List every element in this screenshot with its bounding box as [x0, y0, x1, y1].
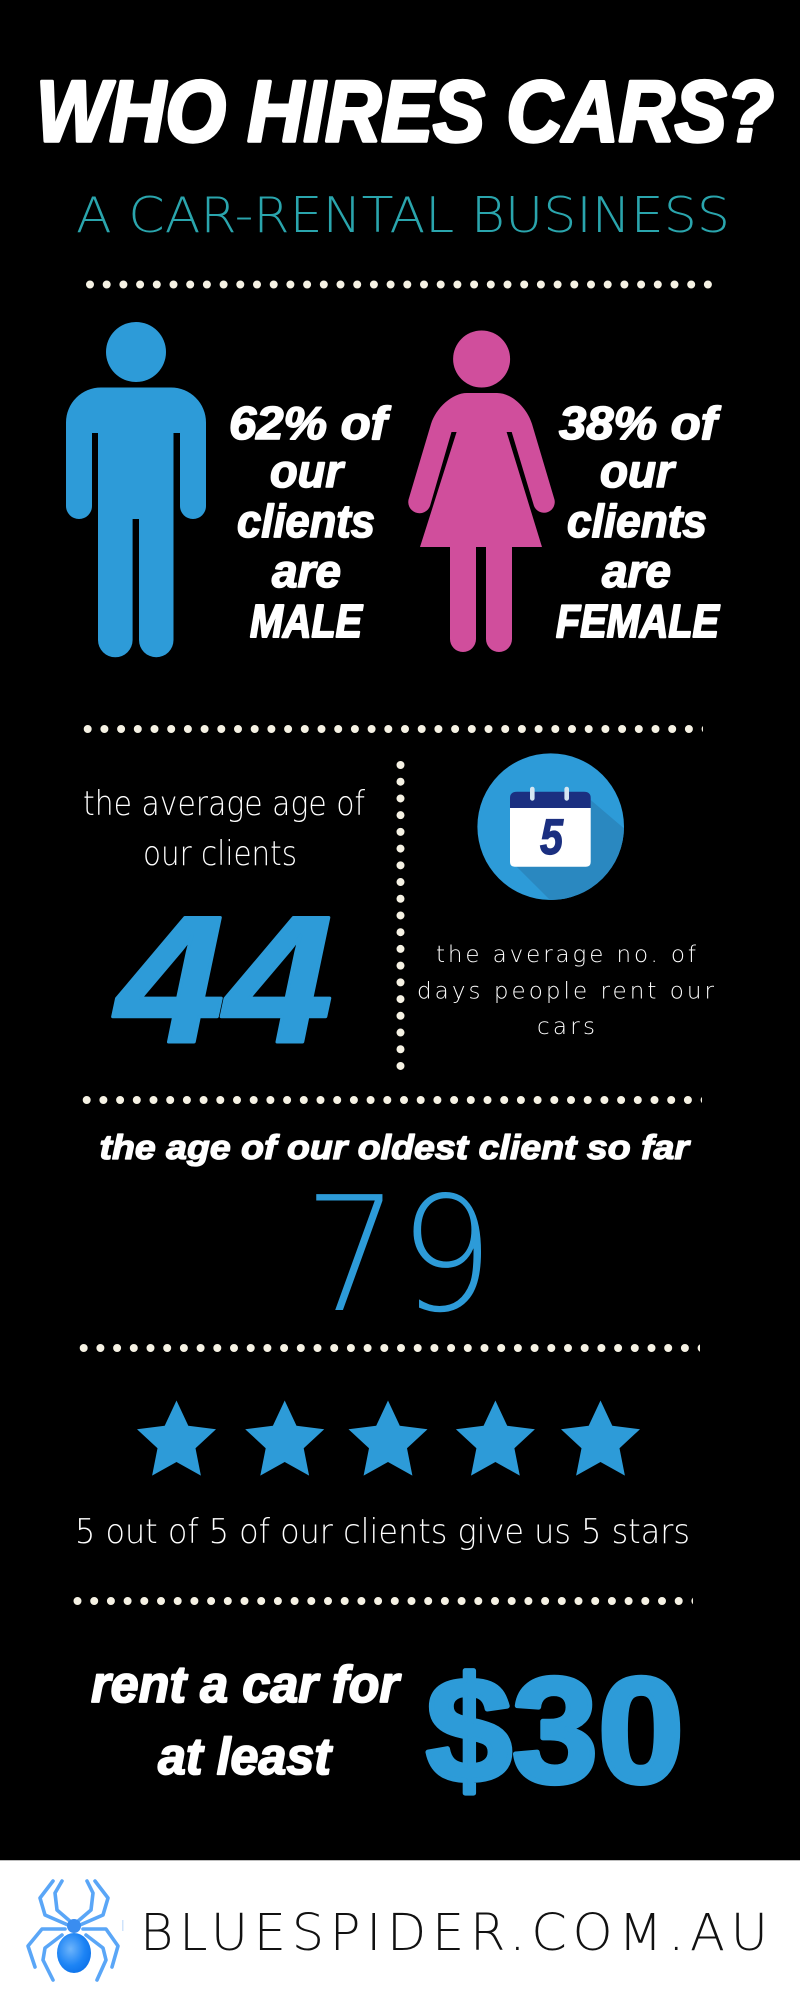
male statistic: clients [237, 495, 375, 547]
icon: man [66, 322, 206, 657]
male statistic: MALE [250, 595, 363, 647]
male statistic: our [270, 445, 345, 497]
average age label [83, 784, 365, 874]
icon: five stars [137, 1400, 640, 1476]
subtitle: A CAR-RENTAL BUSINESS [76, 187, 730, 244]
male statistic: are [272, 545, 341, 597]
icon: woman [408, 330, 555, 652]
average age label: the average age of [83, 784, 365, 824]
rental days label: cars [537, 1014, 595, 1040]
price value: $30 [426, 1646, 684, 1814]
female statistic: FEMALE [556, 595, 720, 647]
panel: star rating [75, 1400, 690, 1552]
average age label: our clients [143, 834, 297, 874]
female statistic: clients [567, 495, 707, 547]
website address: BLUESPIDER.COM.AU [140, 1904, 768, 1963]
oldest client heading: the age of our oldest client so far [100, 1129, 691, 1167]
female statistic: our [600, 445, 676, 497]
panel: average age [83, 784, 365, 1081]
female statistic: 38% of [559, 397, 722, 449]
price label: rent a car for [91, 1656, 402, 1714]
rental days label [417, 942, 715, 1040]
price label: at least [158, 1728, 334, 1786]
icon: calendar [477, 753, 624, 900]
male statistic [229, 397, 392, 647]
panel: oldest client [100, 1129, 691, 1348]
icon: spider logo [28, 1881, 124, 1980]
female statistic [556, 397, 722, 647]
rental days label: days people rent our [417, 978, 715, 1004]
star rating label: 5 out of 5 of our clients give us 5 stars [75, 1512, 690, 1552]
icon: calendar: 5 [540, 809, 564, 865]
price label [91, 1656, 402, 1786]
panel: gender split [66, 322, 722, 657]
panel: price [91, 1646, 684, 1814]
male statistic: 62% of [229, 397, 392, 449]
average age number: 44 [113, 879, 333, 1081]
female statistic: are [602, 545, 671, 597]
rental days label: the average no. of [436, 942, 697, 968]
panel: rental days [417, 753, 715, 1040]
oldest client number: 79 [304, 1163, 494, 1348]
footer band [0, 1860, 800, 2000]
